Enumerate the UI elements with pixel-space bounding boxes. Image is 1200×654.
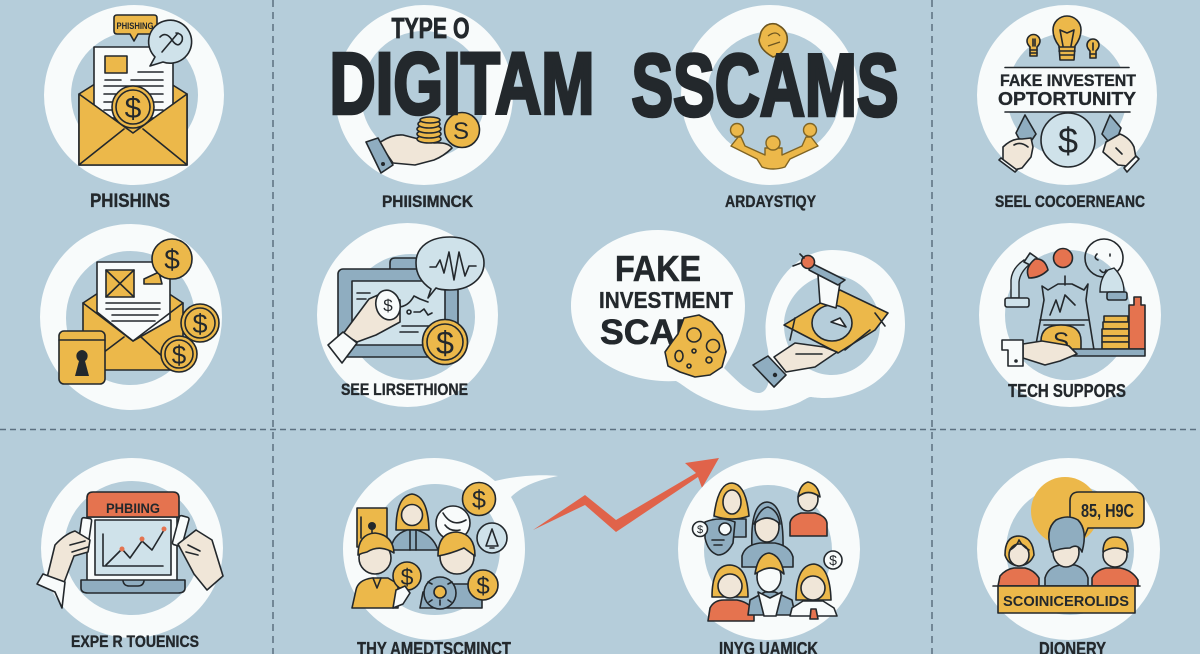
icon: coin stack and bottle — [1073, 297, 1145, 356]
icon: hand — [1002, 340, 1077, 366]
label: EXPE R TOUENICS — [71, 632, 199, 651]
icon: phishing tag: PHISHING — [116, 21, 154, 31]
icon: yellow circle — [1031, 477, 1099, 545]
coin right — [824, 551, 842, 569]
icon: hand holding coin: $ — [383, 296, 393, 315]
ring — [40, 224, 222, 410]
icon: dollar coin: $ — [436, 325, 454, 361]
icon: amount bubble — [1070, 492, 1144, 540]
icon: face and pipe — [1085, 239, 1127, 300]
ring — [977, 5, 1157, 185]
panel: scoin group — [977, 458, 1160, 654]
icon: bell circle — [477, 523, 507, 553]
banner: SCOINICEROLIDS — [1003, 593, 1129, 610]
icon: coin right: $ — [476, 573, 490, 600]
icon: yellow door — [357, 508, 387, 547]
coin right: $ — [829, 552, 837, 568]
mask with coins: $ — [697, 524, 703, 536]
icon: desk lamp — [1005, 253, 1048, 307]
icon: sun circle — [424, 577, 456, 609]
icon: phishing banner: PHBIING — [106, 501, 160, 516]
icon: hand holding broken envelope — [753, 254, 888, 387]
icon: monitor — [338, 258, 458, 357]
text: fake investment scam — [599, 248, 733, 352]
ring — [335, 5, 513, 185]
panel: hand with coins — [335, 5, 513, 211]
banner — [993, 586, 1140, 613]
ring — [681, 5, 859, 185]
icon: coin top — [462, 482, 496, 516]
person centre long hair — [742, 502, 793, 567]
text: opportunity heading — [998, 71, 1137, 109]
icon: bell jar with coin: S — [1053, 328, 1069, 355]
label: ARDAYSTIQY — [725, 193, 816, 211]
icon: coin blob — [759, 24, 787, 57]
panel: phishing envelope — [44, 5, 224, 212]
label: SEE LIRSETHIONE — [341, 380, 468, 399]
icon: coin right — [468, 570, 498, 600]
title: TYPE O — [392, 13, 470, 45]
icon: phishing tag — [114, 15, 157, 41]
person bottom centre — [748, 553, 795, 616]
label: SEEL COCOERNEANC — [995, 193, 1145, 211]
icon: right hand — [172, 515, 223, 590]
ring — [41, 458, 223, 638]
icon: light bulbs — [1027, 16, 1099, 60]
panel: golden figures — [681, 5, 859, 211]
text: fake investment scam: SCAM — [600, 313, 705, 352]
icon: speech bubble — [149, 20, 192, 66]
panel: fake investment opportunity — [977, 5, 1157, 211]
icon: envelope with letter and coin — [79, 47, 187, 165]
text: opportunity heading: OPTORTUNITY — [998, 88, 1137, 109]
icon: amount bubble: 85, H9C — [1081, 501, 1134, 521]
icon: hand holding coin — [328, 287, 403, 363]
panel: group of people — [678, 458, 860, 654]
icon: man left — [352, 533, 398, 608]
arrow: rising trend — [533, 458, 719, 532]
panel: tech support — [979, 223, 1161, 407]
icon: coins: $ — [172, 340, 187, 370]
icon: coin top: $ — [472, 486, 486, 514]
person centre — [1045, 517, 1088, 586]
icon: left hand — [37, 517, 92, 608]
icon: hand and coins: S — [453, 118, 469, 145]
ring — [979, 223, 1161, 407]
panel: chart on laptop — [37, 458, 223, 651]
icon: padlock — [59, 331, 105, 384]
icon: three figures — [730, 124, 818, 169]
label: TECH SUPPORS — [1008, 380, 1126, 401]
person left — [998, 536, 1039, 586]
icon: dollar coin: $ — [1058, 120, 1078, 161]
icon: speech bubble — [416, 237, 484, 298]
mask with coins — [692, 519, 735, 555]
icon: hand and coins — [366, 112, 480, 173]
ring — [678, 458, 860, 640]
icon: dollar coin — [1041, 113, 1095, 167]
icon: woman — [391, 494, 438, 550]
label: PHISHINS — [90, 191, 170, 212]
icon: bell jar with coin — [1035, 276, 1094, 355]
icon: coin middle — [393, 562, 421, 608]
person right — [1092, 537, 1138, 586]
icon: left hand with gem — [999, 115, 1036, 172]
panel: people with coins — [343, 458, 558, 654]
title: SSCAMS — [632, 36, 898, 134]
text: opportunity heading: FAKE INVESTENT — [1000, 71, 1137, 90]
headline lines — [1005, 68, 1130, 112]
panel: online screen — [317, 223, 498, 407]
icon: yin yang — [436, 506, 470, 540]
icon: cookie — [665, 315, 726, 377]
icon: phishing banner — [87, 492, 179, 517]
icon: dollar coin — [422, 320, 468, 364]
title — [330, 13, 898, 134]
text: fake investment scam: INVESTMENT — [599, 287, 733, 313]
icon: orange dot — [1054, 248, 1072, 268]
icon: coin middle: $ — [401, 564, 414, 590]
speech blob and swoosh — [571, 230, 905, 411]
person top right — [790, 482, 827, 536]
text: fake investment scam: FAKE — [615, 248, 701, 289]
icon: coins: $ — [164, 244, 180, 275]
icon: envelope — [83, 262, 183, 370]
panel: locked envelope — [40, 224, 222, 410]
person top left — [714, 483, 749, 537]
person bottom left — [708, 565, 754, 621]
panel: fake investment scam — [571, 230, 905, 411]
icon: coins: $ — [192, 309, 208, 339]
ring — [317, 223, 498, 407]
ring — [44, 5, 224, 185]
icon: laptop with chart — [81, 517, 185, 593]
icon: envelope with letter and coin: $ — [125, 92, 142, 125]
title: DIGITAM — [330, 36, 594, 132]
ring with tail — [343, 458, 558, 640]
ring — [977, 458, 1160, 640]
label: PHIISIMNCK — [382, 193, 473, 211]
white text band — [1000, 67, 1134, 112]
icon: man right — [420, 532, 482, 608]
icon: right hand with gem — [1102, 115, 1139, 172]
person bottom right — [790, 564, 837, 619]
icon: coins — [144, 239, 219, 372]
